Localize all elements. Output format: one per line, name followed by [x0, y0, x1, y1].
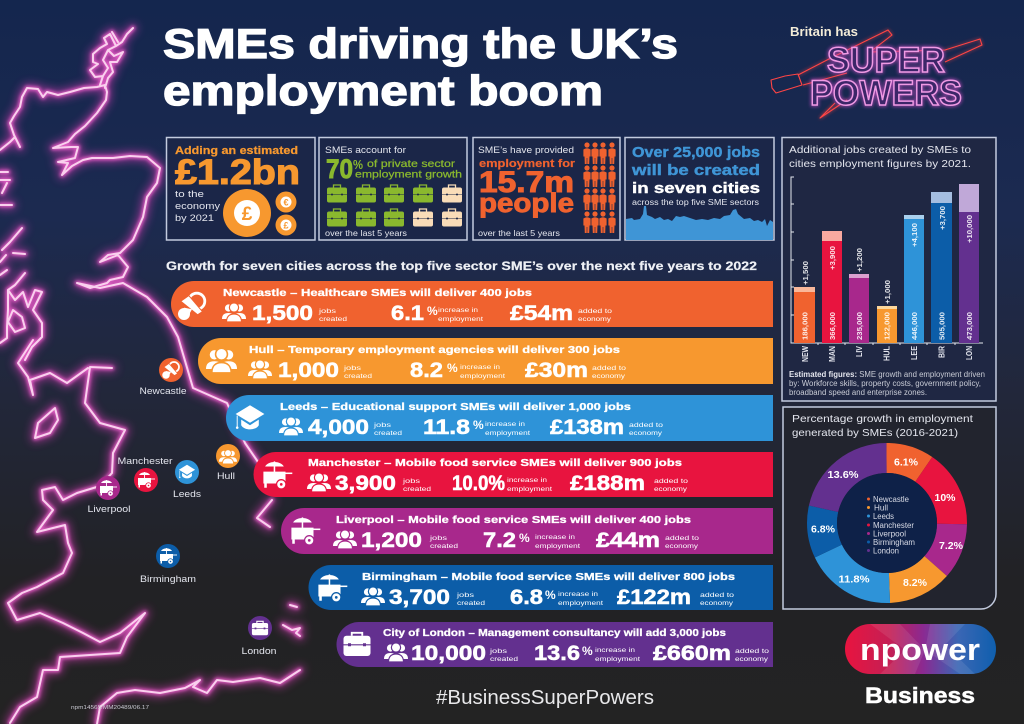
map marker: London — [242, 616, 276, 657]
panel: London: added to — [735, 648, 770, 655]
panel: Hull: £30m — [525, 359, 588, 382]
panel: Newcastle: created — [319, 316, 347, 323]
panel: donut chart: generated by SMEs (2016-2021) — [792, 427, 958, 439]
panel: £1.2bn: economy — [175, 201, 220, 212]
map marker: Newcastle: Newcastle — [140, 386, 186, 397]
panel: £1.2bn: £1.2bn — [175, 153, 300, 192]
logo: npower Business: npower — [860, 632, 980, 667]
panel: Birmingham: 3,700 — [389, 586, 450, 609]
panel: Hull: 1,000 — [278, 359, 339, 382]
panel: Hull: employment — [460, 373, 505, 380]
panel: 25,000 jobs: Over 25,000 jobs — [632, 145, 760, 161]
panel: Birmingham: Birmingham – Mobile food service SMEs will deliver 800 jobs — [362, 571, 735, 583]
panel: Manchester: created — [403, 486, 431, 493]
bar category labels: LON — [965, 346, 974, 360]
panel: 70% employment growth: SMEs account for — [325, 145, 406, 156]
panel: Hull: increase in — [460, 364, 500, 371]
donut labels: 8.2% — [903, 578, 927, 589]
panel: Leeds: increase in — [485, 421, 525, 428]
panel: Newcastle: jobs — [318, 308, 337, 315]
panel: 70% employment growth: of private sector — [367, 158, 456, 170]
bar value labels: +1,500 — [801, 261, 810, 285]
panel: Liverpool: employment — [535, 543, 580, 550]
bar category labels: MAN — [828, 346, 837, 362]
map marker: Hull — [216, 444, 240, 482]
bar value labels: +3,900 — [828, 246, 837, 270]
panel: Newcastle: 6.1 — [391, 302, 424, 325]
print reference code: npm14565/MM20489/06.17 — [71, 705, 149, 711]
panel: Leeds: 4,000 — [308, 416, 369, 439]
donut legend — [867, 495, 915, 556]
bar category labels: BIR — [938, 346, 946, 358]
panel: Leeds: £138m — [550, 416, 624, 439]
panel: Hull: 8.2 — [410, 359, 443, 382]
panel: 70% employment growth — [319, 138, 467, 240]
panel: Newcastle: increase in — [438, 307, 478, 314]
panel: Birmingham: % — [545, 588, 556, 602]
panel: Birmingham: economy — [700, 600, 734, 607]
icon: pacifier — [178, 293, 205, 320]
icon: coins: £ — [242, 204, 253, 225]
bar value labels: +1,200 — [855, 248, 864, 272]
panel: Liverpool: increase in — [535, 534, 575, 541]
panel: bar chart: Additional jobs created by SMEs to — [789, 144, 971, 156]
panel: Leeds: economy — [629, 430, 663, 437]
panel: London: increase in — [595, 647, 635, 654]
panel: Manchester — [254, 452, 773, 497]
panel: donut chart: Percentage growth in employment — [792, 413, 973, 425]
panel: Hull: jobs — [343, 365, 362, 372]
panel: Newcastle: Newcastle – Healthcare SMEs will deliver 400 jobs — [223, 287, 532, 299]
panel: Newcastle: % — [427, 304, 438, 318]
map marker: London: London — [242, 646, 276, 657]
icon: briefcases — [327, 185, 462, 226]
panel: Manchester: economy — [654, 486, 688, 493]
panel: Leeds: 11.8 — [423, 416, 470, 439]
panel: Leeds: added to — [629, 422, 664, 429]
panel: Hull: created — [344, 373, 372, 380]
bar value labels: 473,000 — [965, 312, 974, 340]
panel: Manchester: added to — [654, 478, 689, 485]
title — [163, 20, 678, 114]
panel: bar chart: cities employment figures by 2021. — [789, 158, 971, 170]
panel: Liverpool: 7.2 — [483, 529, 516, 552]
bar value labels: +10,000 — [965, 215, 974, 243]
logo: Britain has Super Powers: POWERS — [810, 74, 962, 113]
logo: Britain has Super Powers: Britain has — [790, 24, 858, 39]
panel: London: £660m — [653, 642, 731, 665]
donut labels: 10% — [934, 493, 956, 504]
chart note: broadband speed and enterprise zones. — [789, 388, 927, 397]
icon: graduation cap — [236, 405, 264, 429]
panel: London: 13.6 — [534, 642, 580, 665]
skyline — [626, 206, 773, 240]
panel: Birmingham: added to — [700, 592, 735, 599]
panel: Birmingham: employment — [558, 600, 603, 607]
panel: Newcastle: economy — [578, 316, 612, 323]
panel: Manchester: £188m — [570, 472, 645, 495]
icon: food cart — [263, 461, 292, 489]
panel: Liverpool: added to — [665, 535, 700, 542]
panel: 25,000 jobs: across the top five SME sectors — [632, 198, 759, 207]
panel: Hull: Hull – Temporary employment agencies will deliver 300 jobs — [249, 344, 620, 356]
panel: 25,000 jobs — [625, 138, 774, 240]
bars — [794, 184, 979, 343]
bar value labels: 235,000 — [855, 312, 864, 340]
panel: 70% employment growth: 70 — [326, 154, 353, 184]
panel: 15.7m people: employment for — [479, 158, 576, 170]
map marker: Manchester: Manchester — [118, 456, 172, 467]
panel: 25,000 jobs: will be created — [631, 163, 760, 179]
panel: 15.7m people: over the last 5 years — [478, 228, 560, 238]
icon: briefcase — [344, 633, 370, 656]
panel: Manchester: Manchester – Mobile food service SMEs will deliver 900 jobs — [308, 457, 682, 469]
panel: donut chart — [783, 407, 996, 609]
panel: Birmingham: £122m — [617, 586, 691, 609]
panel: London — [336, 622, 773, 667]
panel: Leeds: created — [374, 430, 402, 437]
panel: Manchester: increase in — [507, 477, 547, 484]
logo: npower Business — [845, 624, 996, 708]
panel: Liverpool: jobs — [429, 535, 448, 542]
panel: Liverpool: Liverpool – Mobile food service SMEs will deliver 400 jobs — [336, 514, 691, 526]
donut labels: 7.2% — [939, 541, 963, 552]
icon: coins: £ — [283, 220, 289, 230]
panel: 25,000 jobs: in seven cities — [632, 181, 760, 197]
map marker: Liverpool — [88, 476, 130, 515]
panel: 70% employment growth: over the last 5 years — [325, 228, 407, 238]
panel: Hull: economy — [592, 373, 626, 380]
panel: Liverpool: economy — [665, 543, 699, 550]
panel: Manchester: employment — [507, 486, 552, 493]
icon: food cart — [318, 574, 347, 602]
bar value labels: +3,700 — [938, 206, 947, 230]
chart note: by: Workforce skills, property costs, government policy, — [789, 379, 981, 388]
bar value labels — [800, 206, 974, 340]
map marker: Birmingham: Birmingham — [140, 574, 196, 585]
panel: London: created — [490, 656, 518, 663]
chart note — [789, 370, 985, 397]
panel: 70% employment growth: employment growth — [355, 168, 462, 180]
panel: Birmingham: created — [457, 600, 485, 607]
bar category labels: HUL — [882, 346, 892, 361]
logo: Britain has Super Powers: POWERS — [810, 74, 962, 113]
panel: Leeds: employment — [485, 430, 530, 437]
panel: Hull — [198, 338, 773, 384]
map marker: Leeds: Leeds — [173, 489, 201, 500]
bar value labels: 186,000 — [800, 312, 810, 340]
panel: London: % — [582, 644, 593, 658]
panel: Hull: added to — [592, 365, 627, 372]
panel: Newcastle: employment — [438, 316, 483, 323]
logo: Britain has Super Powers: SUPER — [827, 41, 945, 80]
icon: food cart — [291, 517, 320, 545]
hashtag: #BusinessSuperPowers — [436, 687, 654, 709]
panel: Birmingham: 6.8 — [510, 586, 543, 609]
panel: Newcastle: £54m — [510, 302, 573, 325]
panel: Manchester: jobs — [402, 478, 421, 485]
logo: npower Business: Business — [865, 683, 975, 708]
bar category labels — [801, 345, 974, 362]
panel: bar chart — [782, 138, 996, 401]
map marker: Hull: Hull — [217, 471, 235, 482]
section heading: Growth for seven cities across the top five sector SME’s over the next five years to 2022 — [166, 261, 757, 273]
panel: Manchester: 3,900 — [335, 472, 396, 495]
bar category labels: NEW — [801, 346, 810, 362]
donut legend: Leeds — [873, 512, 894, 521]
icon: coins — [223, 189, 296, 237]
panel: £1.2bn: by 2021 — [175, 213, 214, 224]
donut legend: Newcastle — [873, 495, 909, 504]
panel: Newcastle: 1,500 — [252, 302, 313, 325]
bar value labels: 366,000 — [828, 312, 837, 340]
panel: London: economy — [735, 656, 769, 663]
logo: Britain has Super Powers: SUPER — [827, 41, 945, 80]
map marker: Birmingham — [140, 544, 196, 585]
panel: Birmingham — [308, 565, 773, 610]
panel: Hull: % — [447, 361, 458, 375]
donut legend: Manchester — [873, 521, 914, 530]
map marker: Liverpool: Liverpool — [88, 504, 130, 515]
panel: Liverpool: 1,200 — [361, 529, 422, 552]
chart note: Estimated figures: SME growth and employment driven — [789, 370, 985, 379]
panel: Liverpool: £44m — [596, 529, 660, 552]
panel: Leeds: % — [473, 418, 484, 432]
panel: Liverpool: created — [430, 543, 458, 550]
panel: London: 10,000 — [411, 642, 486, 665]
title: SMEs driving the UK’s — [163, 20, 678, 67]
panel: Newcastle — [171, 281, 773, 327]
panel: Newcastle: added to — [578, 308, 613, 315]
panel: 15.7m people: SME’s have provided — [478, 145, 574, 156]
panel: London: employment — [595, 656, 640, 663]
bar value labels: 122,000 — [882, 312, 892, 340]
panel: Leeds: Leeds – Educational support SMEs will deliver 1,000 jobs — [280, 401, 631, 413]
title: employment boom — [163, 67, 603, 114]
panel: Birmingham: jobs — [456, 592, 475, 599]
panel: Leeds: jobs — [373, 422, 392, 429]
panel: 15.7m people: people — [479, 188, 574, 218]
icon: people grid — [583, 142, 616, 233]
bar value labels: 505,000 — [938, 312, 946, 340]
donut legend: Liverpool — [873, 530, 906, 538]
bar value labels: +4,100 — [910, 223, 919, 247]
map marker: Leeds — [173, 460, 201, 500]
bar value labels: 446,000 — [910, 312, 919, 340]
donut labels: 6.8% — [811, 524, 835, 536]
map marker: Manchester — [118, 456, 172, 492]
map marker: Newcastle — [140, 358, 186, 397]
donut labels: 6.1% — [894, 458, 918, 468]
donut labels: 11.8% — [838, 574, 870, 586]
panel: Birmingham: increase in — [558, 591, 598, 598]
panel: 15.7m people — [473, 138, 620, 240]
donut legend: Hull — [874, 504, 888, 512]
bar category labels: LIV — [855, 345, 864, 357]
panel: Manchester: 10.0% — [452, 472, 505, 495]
panel: London: jobs — [489, 648, 508, 655]
neon map of the UK — [0, 28, 300, 724]
panel: London: City of London – Management consultancy will add 3,000 jobs — [383, 627, 726, 639]
panel: 70% employment growth: % — [353, 157, 363, 172]
panel: Liverpool: % — [519, 531, 530, 545]
logo: Britain has Super Powers — [771, 24, 982, 118]
donut legend: London — [873, 546, 899, 556]
icon: people — [206, 348, 237, 373]
axes — [791, 177, 983, 345]
panel: £1.2bn: Adding an estimated — [175, 145, 298, 157]
panel: £1.2bn — [166, 138, 315, 240]
panel: Liverpool — [281, 508, 773, 554]
bar category labels: LEE — [910, 345, 919, 360]
bar value labels: +1,000 — [883, 280, 892, 304]
panel: Leeds — [226, 395, 773, 441]
panel: £1.2bn: to the — [175, 189, 204, 200]
donut labels — [811, 458, 963, 589]
panel: 15.7m people: 15.7m — [479, 166, 574, 199]
donut legend: Birmingham — [873, 538, 915, 547]
icon: coins: € — [283, 198, 289, 208]
donut — [822, 458, 952, 588]
donut labels: 13.6% — [828, 470, 859, 481]
